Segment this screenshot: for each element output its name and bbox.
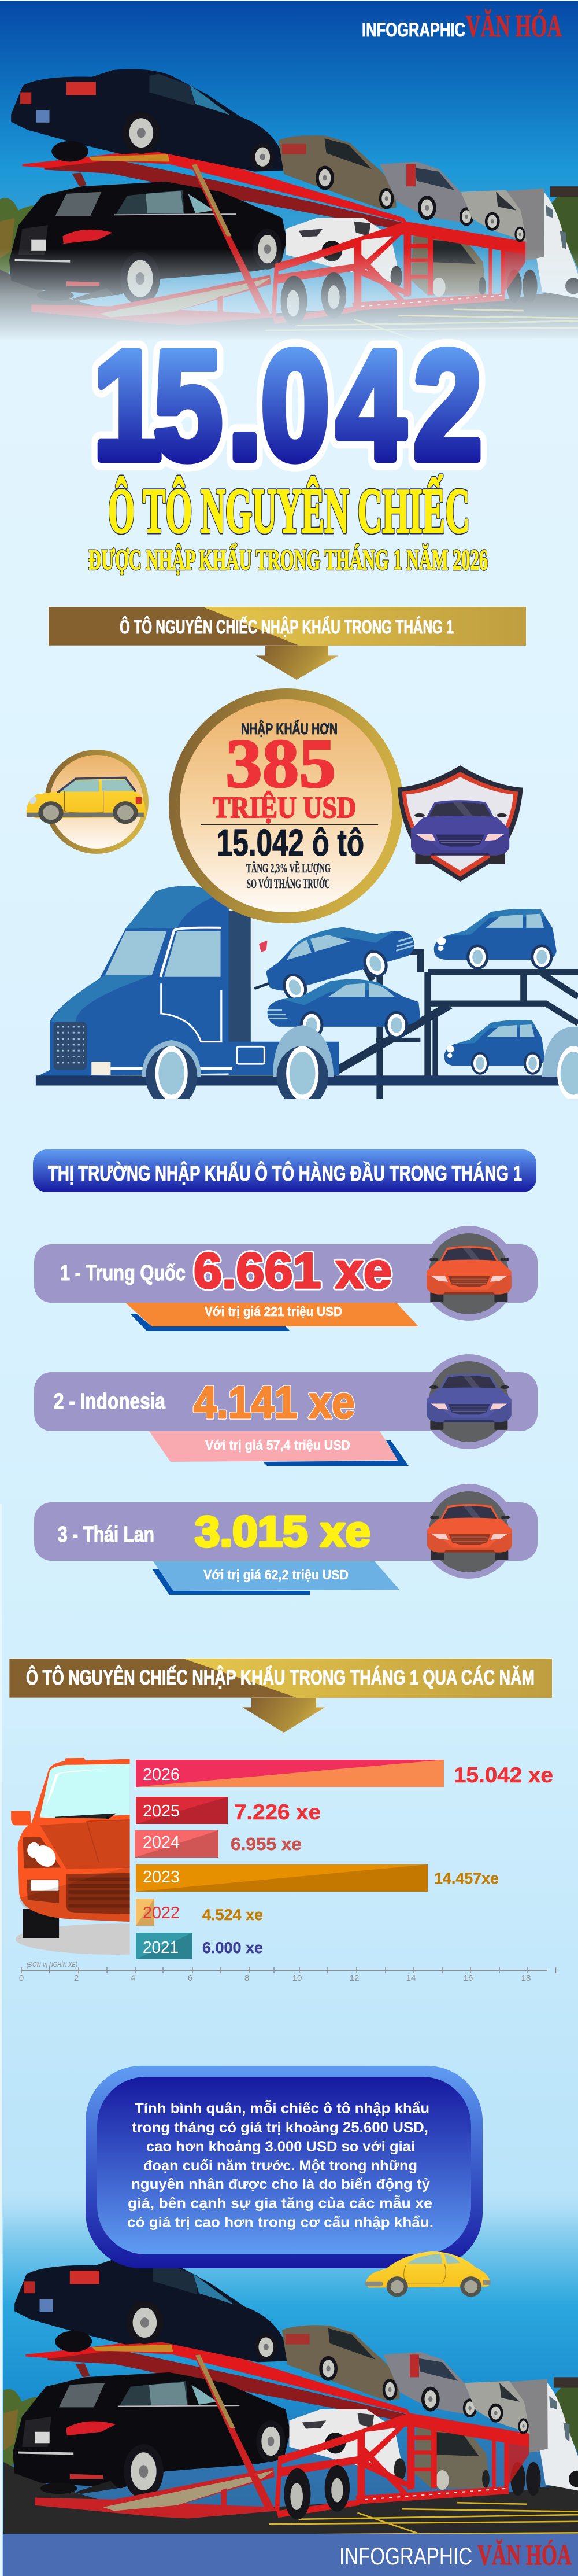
market row 3: Thái Lan: 3 - Thái Lan (58, 1523, 154, 1547)
bar 2023 (136, 1864, 499, 1892)
section banner 1 (49, 607, 526, 680)
wheels (142, 1025, 578, 1107)
title number: 15.042 (93, 319, 482, 492)
circle: quantity: 15.042 ô tô (217, 821, 364, 864)
market row 2: Indonesia: Với trị giá 57,4 triệu USD (205, 1438, 350, 1453)
bar 2025: 2025 (143, 1802, 180, 1820)
callout: average price: đoạn cuối năm trước. Một trong những (143, 2158, 417, 2174)
bar 2022: 2022 (143, 1904, 180, 1922)
market row 1: Trung Quốc: Với trị giá 221 triệu USD (205, 1304, 342, 1319)
market row 2: Indonesia: 4.141 xe (194, 1377, 355, 1428)
chart axis: 4 (131, 1973, 135, 1983)
footer band: INFOGRAPHIC (339, 2542, 472, 2570)
bar 2024: 2024 (143, 1833, 180, 1852)
icon: shield with blue car (398, 765, 523, 882)
bar 2021: 2021 (143, 1939, 179, 1957)
chart axis: 2 (74, 1973, 79, 1983)
chart axis: 0 (19, 1973, 24, 1983)
grille (54, 1022, 87, 1070)
blue truck illustration (36, 886, 578, 1107)
chart axis: 16 (464, 1973, 473, 1983)
market row 3: Thái Lan: Với trị giá 62,2 triệu USD (203, 1567, 349, 1582)
bar 2023: 14.457xe (434, 1870, 499, 1887)
heading: top markets (33, 1149, 536, 1192)
logo: Infographic Văn Hóa (362, 9, 562, 43)
chart axis: 10 (292, 1973, 302, 1983)
ramp frame (254, 952, 578, 1099)
circle: note line 1: TĂNG 2,3% VỀ LƯỢNG (246, 861, 331, 875)
callout: average price: giá, bên cạnh sự gia tăng của các mẫu xe (128, 2194, 432, 2212)
chart axis: 8 (244, 1973, 249, 1983)
callout: average price: Tính bình quân, mỗi chiếc ô tô nhập khẩu (135, 2099, 429, 2117)
bar 2026: 2026 (143, 1766, 180, 1784)
bar 2026: 15.042 xe (454, 1763, 553, 1787)
chart axis: 12 (350, 1973, 359, 1983)
chart axis: 6 (188, 1973, 192, 1983)
cab (37, 886, 231, 1077)
icon: yellow car badge (27, 750, 149, 854)
footer band (3, 2534, 578, 2576)
callout: average price: trong tháng có giá trị khoảng 25.600 USD, (132, 2120, 428, 2136)
callout: average price (86, 2066, 483, 2268)
circle: value: 385 (225, 725, 336, 802)
title number: 15.042 (93, 319, 482, 492)
circle: label: NHẬP KHẨU HƠN (241, 720, 338, 738)
icon: yellow beetle car (365, 2251, 491, 2297)
circle: note line 2: SO VỚI THÁNG TRƯỚC (247, 876, 330, 891)
bar 2025: 7.226 xe (234, 1800, 321, 1824)
bar 2022: 4.524 xe (202, 1906, 263, 1923)
orange car illustration (11, 1757, 130, 1955)
callout: average price: nguyên nhân được cho là do biến động tỷ (131, 2176, 430, 2192)
chart axis: 18 (521, 1973, 531, 1983)
chart axis (19, 1961, 556, 1983)
market row 3: Thái Lan (34, 1484, 538, 1595)
market row 3: Thái Lan: 3.015 xe (195, 1508, 370, 1556)
callout: average price: cao hơn khoảng 3.000 USD so với giai (146, 2139, 415, 2155)
bar 2021 (136, 1933, 263, 1959)
big gold circle (169, 688, 403, 923)
market row 2: Indonesia: 4.141 xe (194, 1377, 355, 1428)
market row 1: Trung Quốc: 6.661 xe (194, 1243, 392, 1299)
bar 2022 (136, 1899, 263, 1926)
callout: average price: có giá trị cao hơn trong cơ cấu nhập khẩu. (127, 2214, 433, 2231)
market row 2: Indonesia (34, 1354, 538, 1466)
bar 2021: 6.000 xe (202, 1939, 263, 1956)
chart axis: (ĐƠN VỊ NGHÌN XE) (27, 1961, 77, 1969)
bar 2024: 6.955 xe (231, 1834, 302, 1854)
logo: Infographic Văn Hóa: INFOGRAPHIC (362, 19, 465, 41)
bar 2026 (136, 1760, 553, 1787)
circle: unit: TRIỆU USD (213, 791, 356, 824)
section banner 2 (9, 1659, 552, 1733)
bar 2023: 2023 (143, 1868, 180, 1886)
bar 2025 (136, 1797, 321, 1824)
chart axis: 14 (406, 1973, 416, 1983)
bar 2024 (135, 1830, 302, 1858)
market row 2: Indonesia: 2 - Indonesia (54, 1390, 166, 1414)
market row 1: Trung Quốc: 1 - Trung Quốc (60, 1261, 186, 1285)
bar chart (135, 1760, 553, 1959)
market row 1: Trung Quốc: 6.661 xe (194, 1243, 392, 1299)
hero photo: car transporter (0, 0, 578, 343)
bottom photo: car transporter (0, 2187, 578, 2537)
market row 1: Trung Quốc (34, 1226, 538, 1331)
